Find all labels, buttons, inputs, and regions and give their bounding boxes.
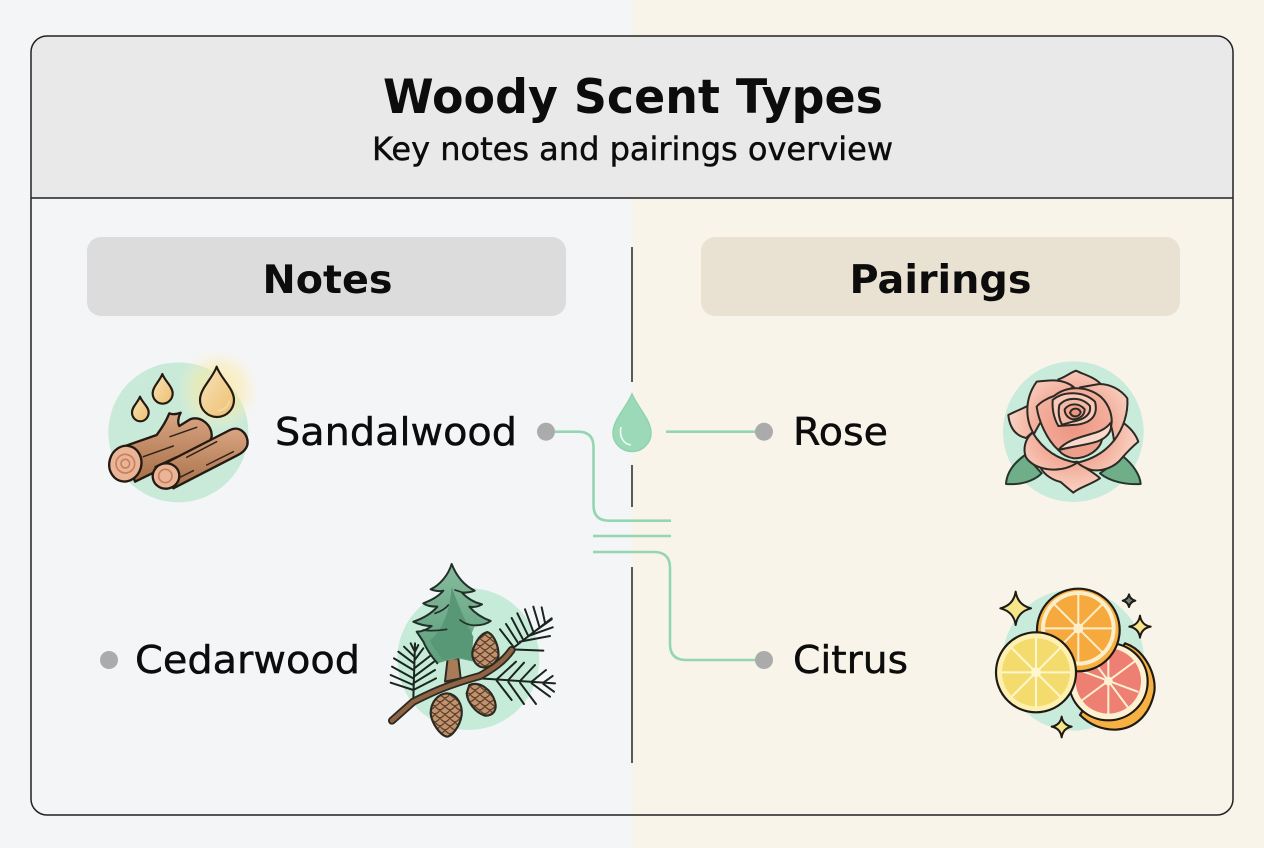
label: Rose: Rose [793, 410, 888, 454]
icon: center water drop [613, 394, 651, 452]
leaves [1006, 455, 1141, 484]
column heading: Notes: Notes [262, 258, 392, 303]
pine needles [391, 607, 555, 704]
center divider [631, 247, 633, 763]
connector dot: Rose [755, 423, 773, 441]
icon: citrus slices [996, 589, 1155, 737]
icon: sandalwood logs and oil drops [105, 348, 260, 502]
tree trunk [445, 658, 461, 682]
label: Cedarwood: Cedarwood [135, 638, 360, 682]
connector lines [555, 432, 757, 660]
branch [392, 650, 512, 721]
connector dot: Cedarwood [100, 651, 118, 669]
log one [105, 413, 212, 485]
column heading: Pairings [701, 237, 1180, 316]
pine cones [431, 632, 498, 737]
panel: header [31, 36, 1233, 198]
petals [1008, 371, 1138, 493]
label: Sandalwood: Sandalwood [275, 410, 517, 454]
sparkles [1000, 592, 1151, 737]
connector dot: Sandalwood [537, 423, 555, 441]
subtitle: Key notes and pairings overview [372, 130, 893, 168]
log two [151, 429, 248, 491]
title: Woody Scent Types [383, 70, 883, 125]
icon: rose [1003, 361, 1144, 502]
background: right half [632, 0, 1264, 848]
grapefruit half [1069, 643, 1155, 730]
column heading: Notes [87, 237, 566, 316]
connector dot: Citrus [755, 651, 773, 669]
icon: cedar tree and pine branch [391, 564, 555, 737]
background: left half [0, 0, 632, 848]
orange slice [1037, 589, 1120, 671]
column heading: Pairings: Pairings [850, 258, 1032, 303]
tree foliage [413, 564, 491, 663]
lemon slice [996, 632, 1076, 712]
label: Citrus: Citrus [793, 638, 908, 682]
oil drops [132, 367, 234, 421]
